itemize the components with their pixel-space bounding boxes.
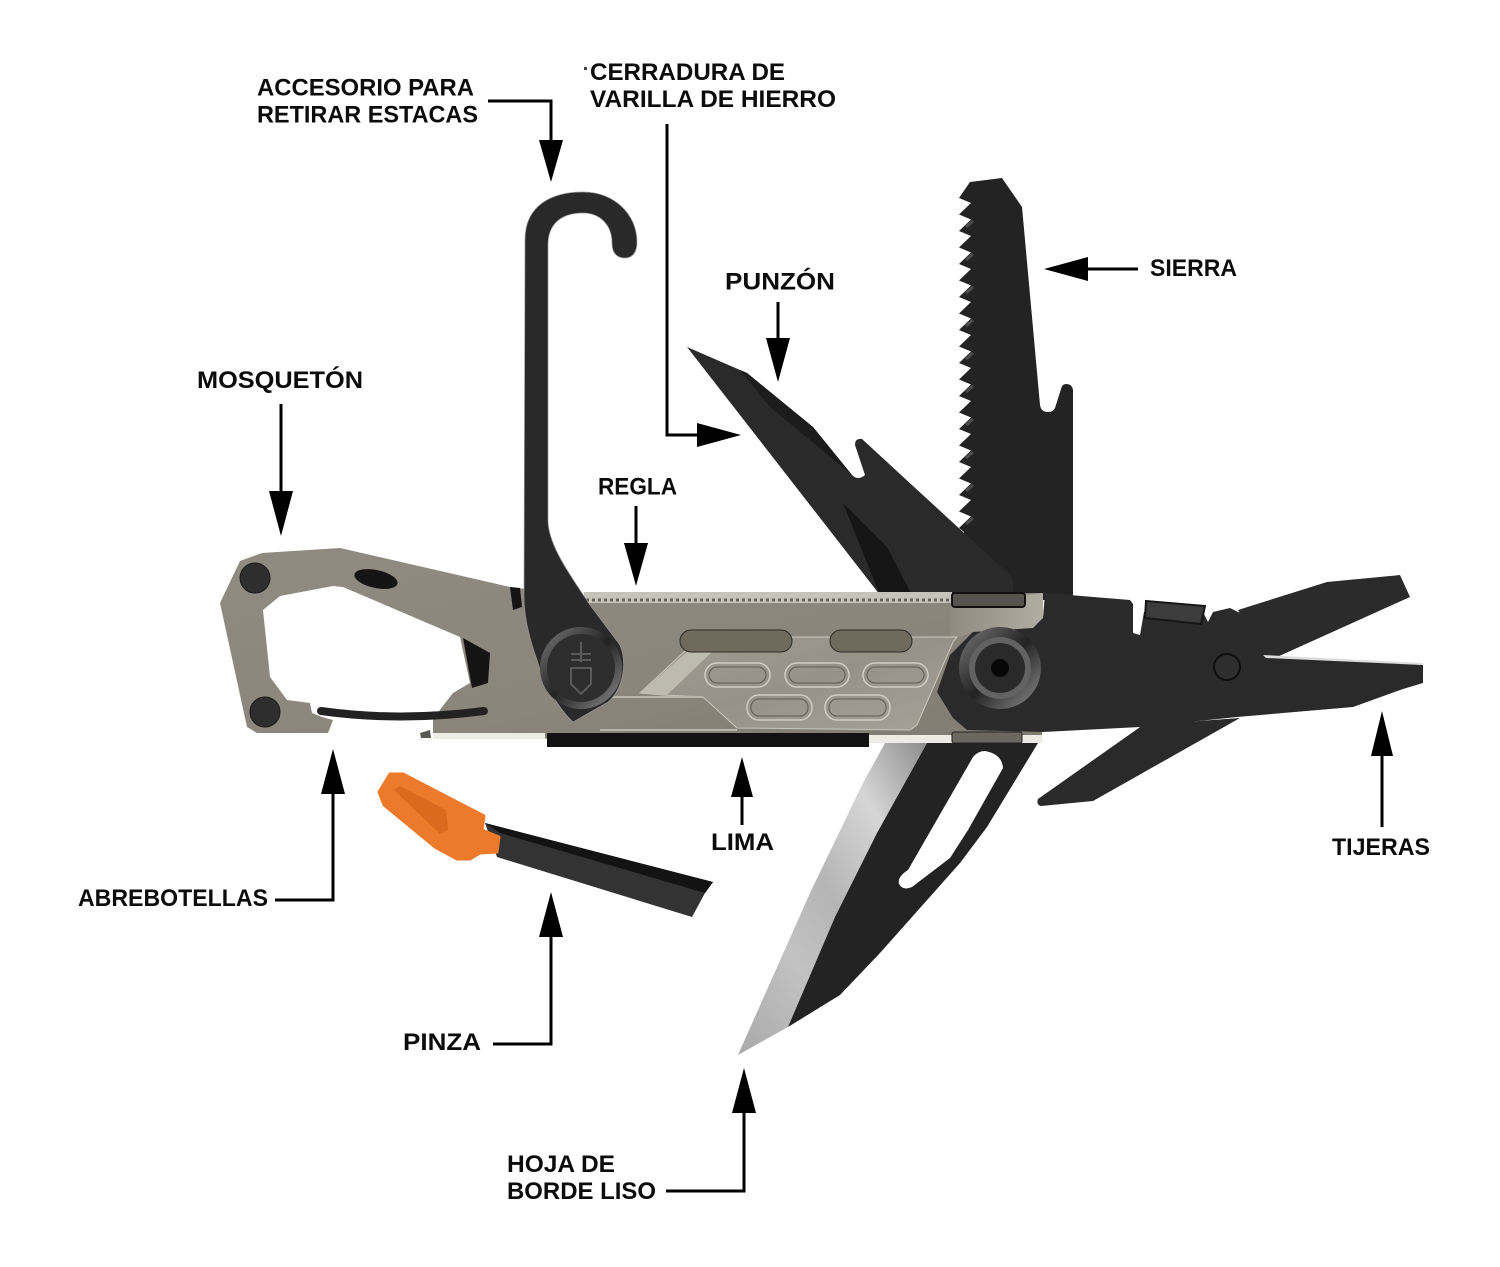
label: carabiner: MOSQUETÓN — [197, 366, 363, 394]
tool: straight edge blade — [738, 743, 1038, 1055]
pivot with logo — [540, 627, 622, 709]
tool: handle and carabiner — [220, 548, 1043, 747]
carabiner slot — [353, 566, 399, 592]
scissors pin — [1214, 654, 1240, 680]
ruler strip — [584, 592, 952, 603]
label: file: LIMA — [711, 829, 774, 856]
arrow: ruler — [624, 506, 648, 586]
right body highlight — [950, 593, 1043, 640]
label: rod lock: CERRADURA DE — [590, 59, 785, 86]
label: straight edge blade: BORDE LISO — [507, 1178, 656, 1205]
arrow: bottle opener — [275, 749, 345, 900]
label: tweezers: PINZA — [403, 1029, 481, 1056]
bottom steel strip — [433, 733, 1042, 743]
raised ovals inner lines — [709, 667, 924, 716]
arrow: straight edge blade — [666, 1068, 756, 1191]
body rim lines — [600, 697, 737, 730]
inner plate — [640, 637, 957, 730]
tool: tweezers — [379, 774, 713, 917]
arrow: file — [731, 757, 753, 825]
arrow: tweezers — [493, 892, 563, 1044]
scissors spring clip — [1145, 601, 1205, 624]
label: saw: SIERRA — [1150, 255, 1237, 282]
arrow: stake puller — [488, 101, 563, 182]
arrow: awl — [766, 302, 790, 382]
tool: scissors — [937, 575, 1423, 732]
label: scissors: TIJERAS — [1332, 834, 1430, 861]
tool: stake puller hook — [524, 192, 637, 722]
inner black gap — [463, 638, 490, 688]
label: rod lock — [590, 59, 836, 113]
carabiner rivets — [240, 563, 280, 727]
arrow: scissors — [1371, 711, 1393, 827]
file — [547, 733, 869, 747]
raised ovals — [705, 663, 928, 720]
arrow: rod lock — [667, 124, 741, 447]
lock clips — [952, 593, 1025, 743]
label: bottle opener: ABREBOTELLAS — [78, 885, 268, 912]
wire gate (bottle opener) — [321, 711, 484, 716]
label: stake puller — [257, 74, 478, 128]
arrow: carabiner — [269, 404, 293, 536]
label: awl: PUNZÓN — [725, 268, 835, 296]
tool: awl — [687, 347, 1013, 595]
label: stake puller: RETIRAR ESTACAS — [257, 102, 478, 128]
label: ruler: REGLA — [598, 474, 677, 500]
tool: saw — [959, 178, 1073, 600]
label: straight edge blade: HOJA DE — [507, 1151, 615, 1178]
plate highlight — [640, 652, 712, 695]
small mark — [584, 67, 587, 70]
label: rod lock: VARILLA DE HIERRO — [590, 86, 836, 113]
label: stake puller: ACCESORIO PARA — [257, 74, 474, 102]
tool: screw — [959, 627, 1041, 709]
top slots — [680, 630, 912, 652]
tool: lower scissor blade — [1037, 718, 1240, 806]
label: straight edge blade — [507, 1151, 656, 1205]
arrow: saw — [1044, 257, 1138, 281]
